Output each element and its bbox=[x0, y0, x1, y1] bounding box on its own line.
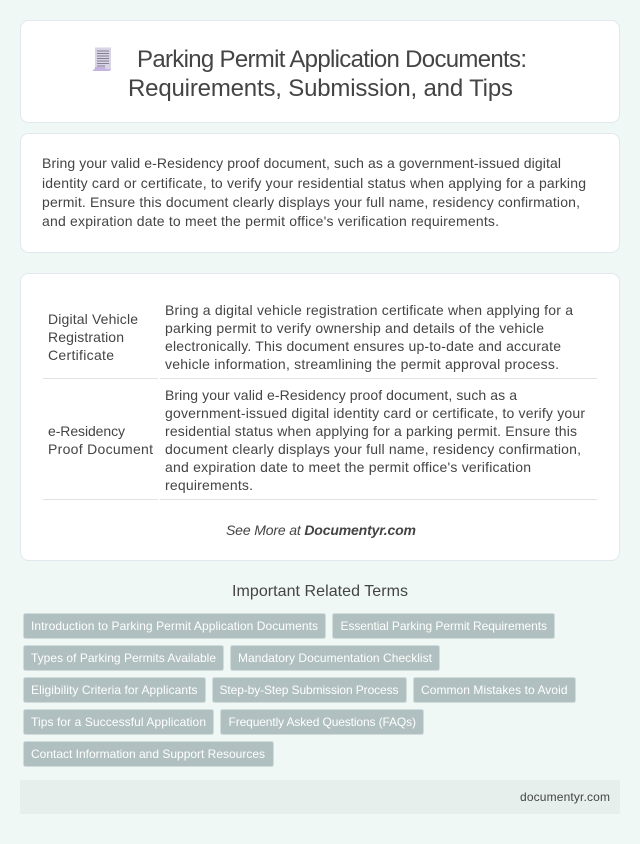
heading: important related terms: Important Related Terms bbox=[232, 583, 408, 600]
table row: digital vehicle registration certificate bbox=[43, 302, 597, 379]
tag: Tips for a Successful Application bbox=[31, 715, 206, 729]
tag bbox=[24, 614, 326, 638]
title: Requirements, Submission, and Tips bbox=[128, 75, 513, 102]
footer: documentyr.com bbox=[520, 790, 610, 804]
tag: Essential Parking Permit Requirements bbox=[340, 619, 547, 633]
see more link: See More at Documentyr.com bbox=[226, 522, 416, 538]
tag: Eligibility Criteria for Applicants bbox=[31, 683, 198, 697]
tag bbox=[230, 646, 440, 670]
tag: Common Mistakes to Avoid bbox=[421, 683, 568, 697]
row label: Proof Document bbox=[48, 441, 153, 457]
tag bbox=[24, 646, 224, 670]
row description: requirements. bbox=[165, 477, 253, 493]
row description: and expiration date to meet the permit office's verification bbox=[165, 459, 531, 475]
tag: Types of Parking Permits Available bbox=[31, 651, 216, 665]
panel: title card bbox=[20, 20, 620, 122]
tag bbox=[220, 710, 424, 734]
tag bbox=[24, 710, 214, 734]
row description: document clearly displays your full name, residency confirmation, bbox=[165, 441, 581, 457]
tag: Contact Information and Support Resources bbox=[31, 747, 265, 761]
row description: residential status when applying for a parking permit. Ensure this bbox=[165, 423, 577, 439]
tag: Step-by-Step Submission Process bbox=[220, 683, 398, 697]
row description: government-issued digital identity card or certificate, to verify your bbox=[165, 405, 585, 421]
row label bbox=[48, 423, 153, 457]
title bbox=[128, 46, 527, 102]
panel: related term tags bbox=[24, 614, 576, 766]
row description: vehicle information, streamlining the permit approval process. bbox=[165, 356, 559, 372]
row label: Digital Vehicle bbox=[48, 311, 138, 327]
row label: e-Residency bbox=[48, 423, 125, 439]
footer bbox=[20, 780, 620, 814]
row label bbox=[48, 311, 138, 363]
intro paragraph: Bring your valid e-Residency proof document, such as a government-issued digital bbox=[42, 155, 561, 171]
title: Parking Permit Application Documents: bbox=[137, 46, 527, 73]
row description: Bring a digital vehicle registration certificate when applying for a bbox=[165, 302, 573, 318]
tag: Mandatory Documentation Checklist bbox=[238, 651, 433, 665]
panel: introduction bbox=[20, 134, 620, 252]
tag bbox=[414, 678, 576, 702]
table row: e-residency proof document bbox=[43, 387, 597, 500]
tag bbox=[212, 678, 406, 702]
intro paragraph bbox=[42, 155, 586, 229]
row label: Certificate bbox=[48, 347, 114, 363]
row description bbox=[165, 387, 585, 493]
intro paragraph: permit. Ensure this document clearly displays your full name, residency confirmation, bbox=[42, 194, 580, 210]
intro paragraph: identity card or certificate, to verify your residential status when applying for a parking bbox=[42, 175, 586, 191]
tag: Frequently Asked Questions (FAQs) bbox=[228, 715, 416, 729]
panel: documents table bbox=[20, 274, 620, 560]
row description: electronically. This document ensures up-to-date and accurate bbox=[165, 338, 561, 354]
tag bbox=[24, 742, 274, 766]
row description: Bring your valid e-Residency proof document, such as a bbox=[165, 387, 517, 403]
row label: Registration bbox=[48, 329, 124, 345]
icon: document scroll bbox=[92, 48, 111, 71]
row description: parking permit to verify ownership and details of the vehicle bbox=[165, 320, 544, 336]
intro paragraph: and expiration date to meet the permit office's verification requirements. bbox=[42, 213, 499, 229]
row description bbox=[165, 302, 573, 372]
tag bbox=[24, 678, 206, 702]
tag bbox=[332, 614, 554, 638]
tag: Introduction to Parking Permit Application Documents bbox=[31, 619, 318, 633]
